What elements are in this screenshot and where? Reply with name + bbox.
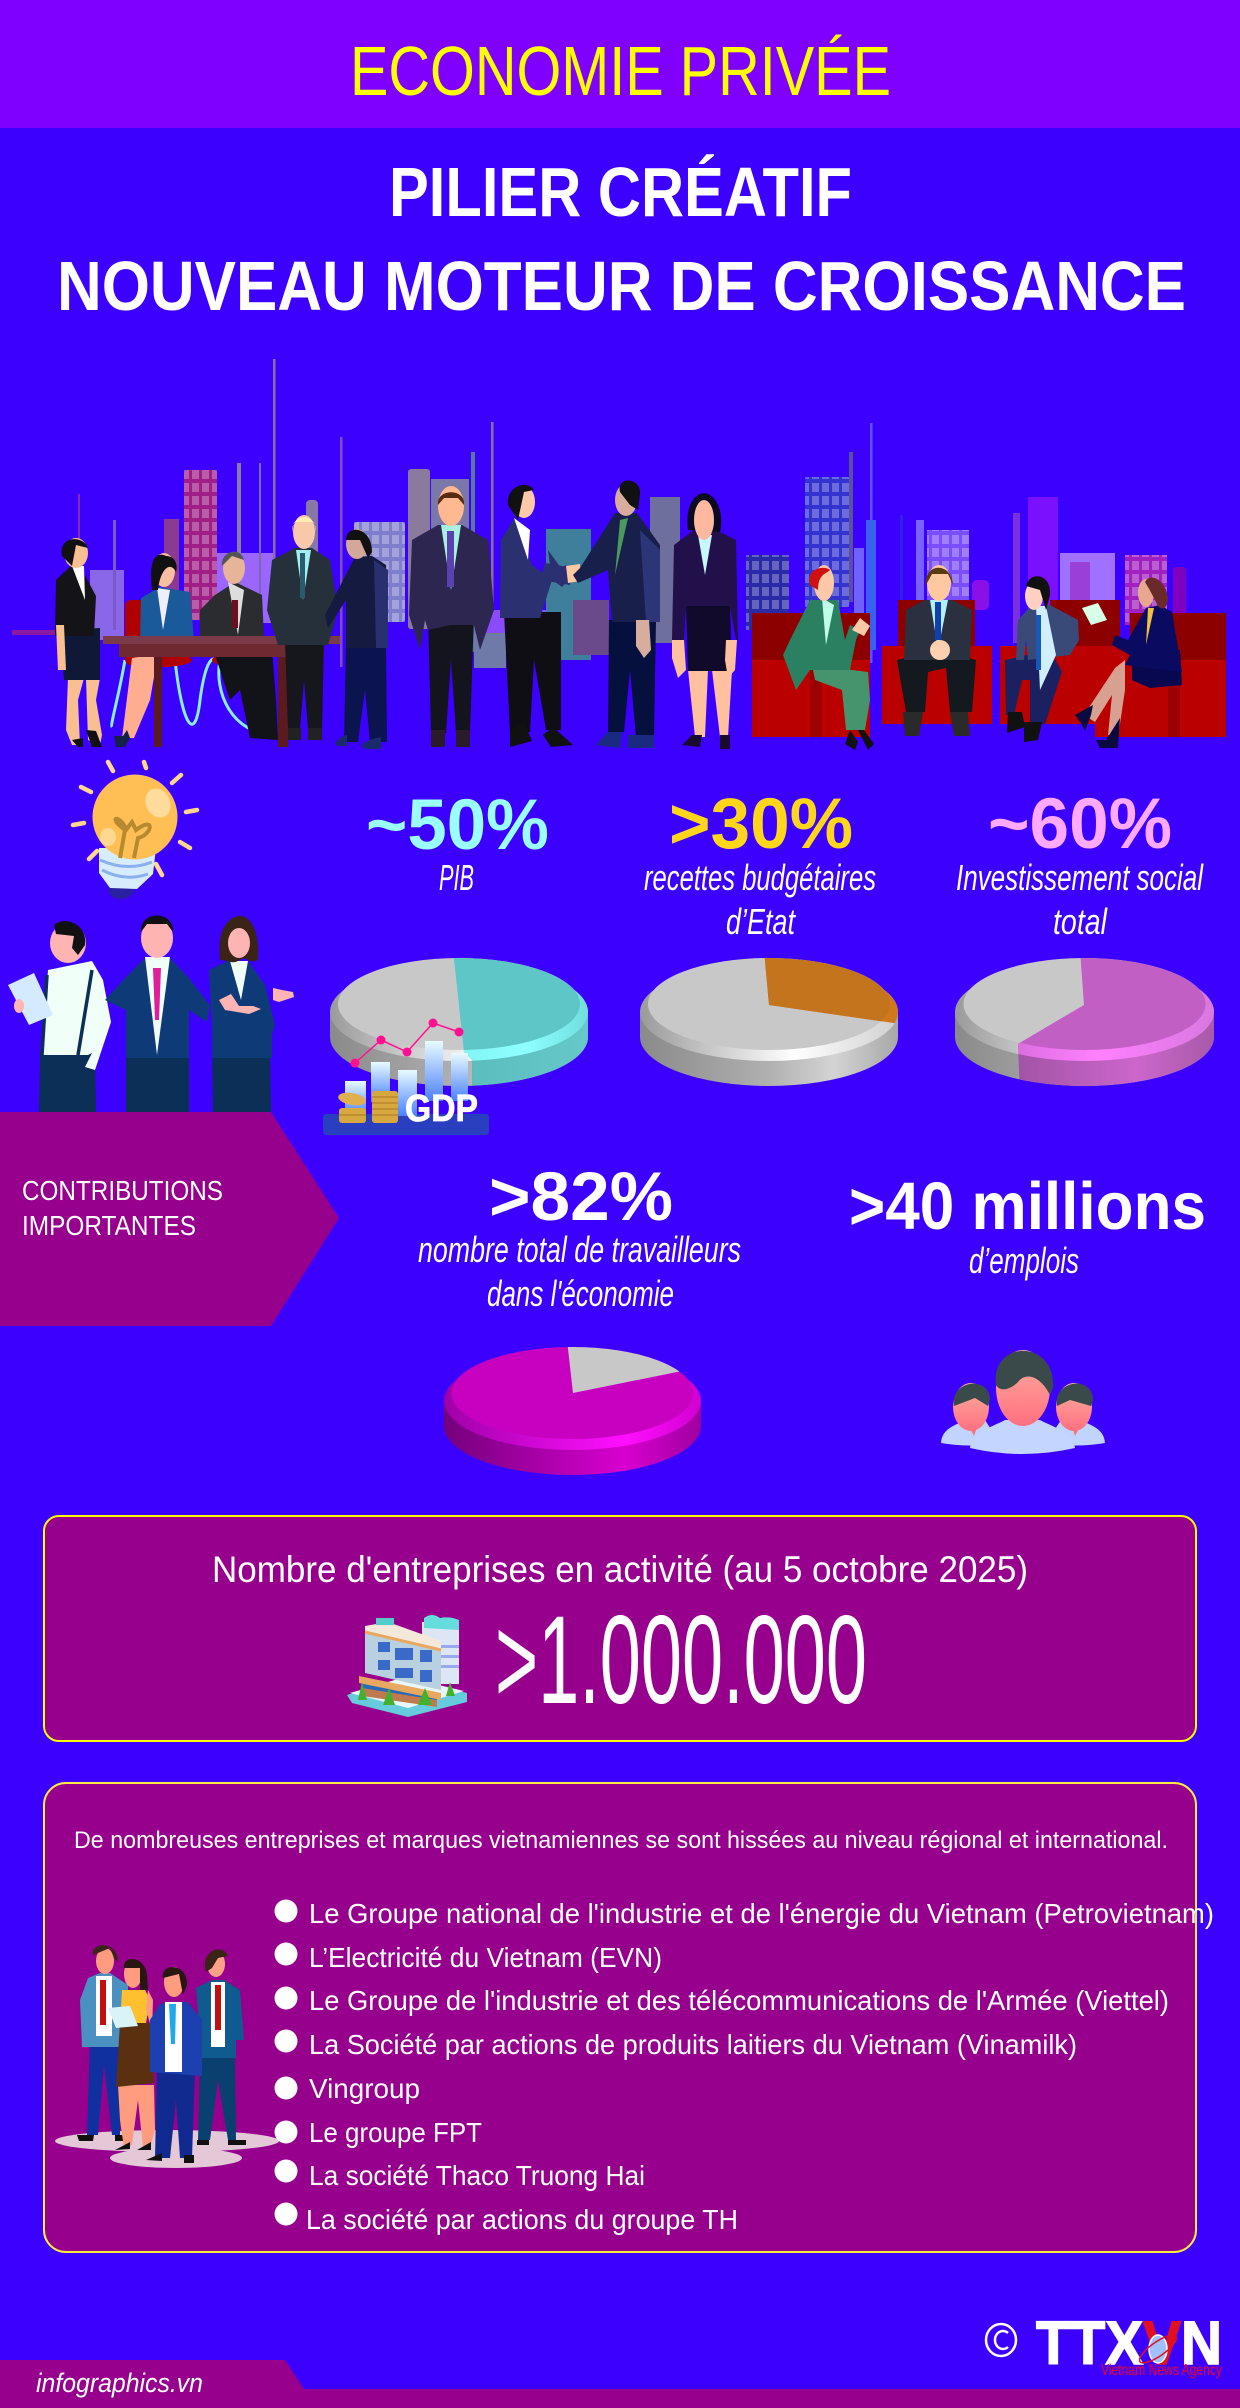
person: front man (146, 1967, 202, 2163)
list item: EVN: L’Electricité du Vietnam (EVN) (309, 1942, 662, 1973)
stat: 82% workers: >82% (489, 1158, 673, 1235)
person: man in profile (325, 529, 388, 749)
icon: GDP chart with coins (323, 1018, 489, 1135)
arrow banner: contributions importantes (0, 1112, 339, 1326)
standing business people (267, 481, 738, 749)
list item: Petrovietnam: Le Groupe national de l'industrie et de l'énergie du Vietnam (Petrovietnam) (309, 1898, 1214, 1929)
person: woman in green (783, 565, 874, 750)
list item: TH: La société par actions du groupe TH (306, 2204, 738, 2235)
person: left handshake man (500, 485, 580, 747)
table with seated people (55, 538, 340, 747)
stat: 40 millions jobs: >40 millions (849, 1169, 1206, 1244)
sofa middle (882, 600, 992, 724)
chair legs (112, 659, 277, 735)
main title: PILIER CRÉATIF (389, 153, 852, 231)
pie chart: 60% (955, 958, 1214, 1086)
stat: 30% budget: recettes budgétaires (644, 857, 876, 898)
icon: office building (347, 1615, 467, 1717)
stat: 40 millions jobs (849, 1169, 1206, 1281)
arrow banner: contributions importantes: IMPORTANTES (22, 1210, 196, 1241)
person: standing woman in dark suit (672, 493, 738, 749)
logo: TTXVN: TTXVN (1036, 2309, 1222, 2377)
list item: Thaco: La société Thaco Truong Hai (309, 2160, 645, 2191)
table (103, 636, 340, 747)
person: seated woman (114, 553, 194, 747)
stat: 30% budget: d’Etat (726, 901, 796, 942)
pie chart: 82% (444, 1347, 701, 1475)
stat: 60% investment: total (1053, 901, 1108, 942)
arrow banner: contributions importantes: CONTRIBUTIONS (22, 1175, 223, 1206)
panel intro text: De nombreuses entreprises et marques vietnamiennes se sont hissées au niveau régional et international. (74, 1827, 1168, 1854)
stat: 40 millions jobs: d’emplois (969, 1240, 1079, 1281)
main title (57, 153, 1186, 325)
person: woman with document (1075, 578, 1182, 748)
sofa right (1000, 600, 1226, 737)
person: woman in yellow (108, 1959, 155, 2150)
list item: Viettel: Le Groupe de l'industrie et des télécommunications de l'Armée (Viettel) (309, 1985, 1169, 2016)
header band (0, 0, 1240, 128)
stat: 50% PIB: PIB (439, 857, 474, 898)
person: woman in blue suit (209, 916, 294, 1112)
stat: 60% investment: ~60% (988, 785, 1172, 864)
person: man in side view (1005, 576, 1079, 742)
person: man in blue suit (105, 916, 210, 1112)
panel heading: Nombre d'entreprises en activité (au 5 octobre 2025) (212, 1549, 1028, 1590)
header title: ECONOMIE PRIVÉE (350, 32, 891, 110)
pie chart: 50% (330, 958, 588, 1086)
person: central man (409, 486, 494, 747)
list of brands (274, 1898, 1214, 2235)
copyright symbol (986, 2324, 1016, 2356)
icon: light bulb (73, 762, 197, 899)
stat: 30% budget: >30% (669, 785, 853, 864)
three business people group (8, 916, 294, 1112)
people seated on red sofas (752, 565, 1226, 750)
person: seated man (200, 552, 278, 740)
sofa left (752, 613, 870, 737)
icon: GDP chart with coins: GDP (405, 1088, 478, 1130)
big number: >1.000.000 (495, 1591, 867, 1730)
stat: 50% PIB: ~50% (366, 786, 549, 865)
footer website: infographics.vn (36, 2368, 203, 2398)
person: man back right (196, 1949, 246, 2145)
list item: Vinamilk: La Société par actions de produits laitiers du Vietnam (Vinamilk) (309, 2029, 1077, 2060)
list item: Vingroup: Vingroup (309, 2073, 420, 2104)
stat: 30% budget (644, 785, 876, 942)
person: man back left (77, 1945, 128, 2141)
stat: 82% workers: dans l'économie (487, 1273, 674, 1314)
stat: 82% workers (418, 1158, 741, 1314)
stat: 82% workers: nombre total de travailleurs (418, 1229, 741, 1270)
person: man with tablet (8, 921, 111, 1112)
pie chart: 30% (640, 958, 898, 1086)
list item: FPT: Le groupe FPT (309, 2117, 482, 2148)
illustration: business team (55, 1945, 279, 2168)
icon: three people heads (941, 1350, 1105, 1454)
footer band (0, 2360, 1240, 2408)
person: right handshake man (573, 481, 660, 748)
skyline illustration (12, 359, 1186, 668)
panel: number of businesses (44, 1516, 1196, 1741)
person: standing woman left (55, 538, 102, 747)
panel: vietnamese brands (44, 1783, 1214, 2252)
stat: 60% investment (956, 785, 1204, 942)
person: man in middle (897, 565, 976, 736)
person: blond man (267, 515, 338, 740)
